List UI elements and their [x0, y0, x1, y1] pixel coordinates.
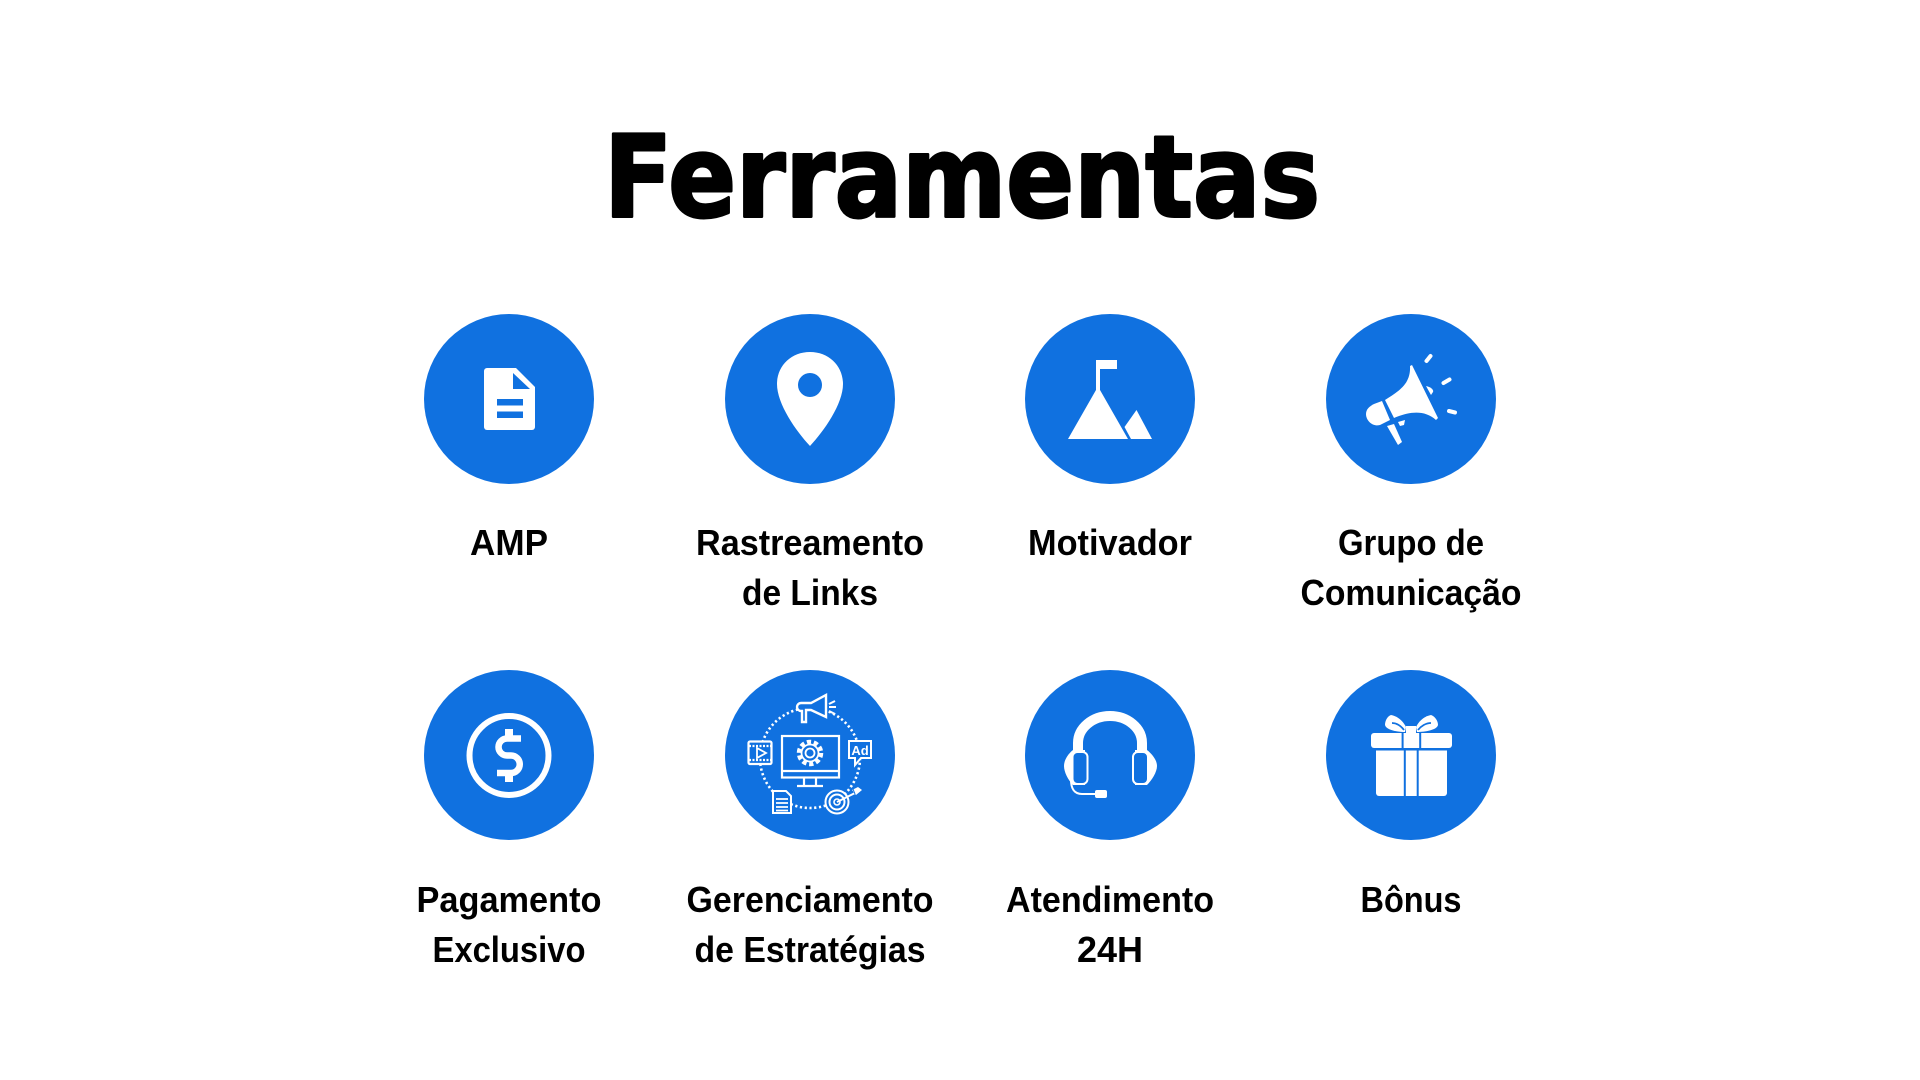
panel: Pagamento Exclusivo	[416, 670, 602, 970]
label: Atendimento 24H	[1006, 879, 1214, 970]
label: Rastreamento de Links: de Links	[742, 572, 878, 613]
label: AMP: AMP	[470, 522, 548, 563]
icon: dollar coin	[424, 670, 594, 840]
label: Rastreamento de Links: Rastreamento	[696, 522, 924, 563]
label: Grupo de Comunicação	[1300, 522, 1522, 613]
label: Gerenciamento de Estratégias: Gerenciamento	[686, 879, 934, 920]
label: Atendimento 24H: 24H	[1077, 929, 1143, 970]
label: Gerenciamento de Estratégias: de Estratégias	[694, 929, 926, 970]
panel: Gerenciamento de Estratégias	[686, 670, 934, 970]
label: Gerenciamento de Estratégias	[686, 879, 934, 970]
panel: Bônus	[1326, 670, 1496, 920]
icon: mountain with flag	[1025, 314, 1195, 484]
icon: headset	[1025, 670, 1195, 840]
panel: Rastreamento de Links	[696, 314, 924, 613]
icon: location pin	[725, 314, 895, 484]
panel: Grupo de Comunicação	[1300, 314, 1522, 613]
panel: Motivador	[1025, 314, 1195, 563]
label: Atendimento 24H: Atendimento	[1006, 879, 1214, 920]
icon: gift	[1326, 670, 1496, 840]
label: Grupo de Comunicação: Grupo de	[1338, 522, 1484, 563]
label: Bônus: Bônus	[1360, 879, 1462, 920]
panel: Atendimento 24H	[1006, 670, 1214, 970]
label: Pagamento Exclusivo: Exclusivo	[432, 929, 586, 970]
title: Ferramentas	[604, 112, 1320, 244]
panel: AMP	[424, 314, 594, 563]
label: Pagamento Exclusivo: Pagamento	[416, 879, 602, 920]
label: Pagamento Exclusivo	[416, 879, 602, 970]
icon: megaphone	[1326, 314, 1496, 484]
icon: document	[424, 314, 594, 484]
icon: strategy cycle: Ad	[851, 743, 869, 758]
label: Motivador: Motivador	[1028, 522, 1192, 563]
label: Rastreamento de Links	[696, 522, 924, 613]
label: Grupo de Comunicação: Comunicação	[1300, 572, 1522, 613]
icon: strategy cycle	[725, 670, 895, 840]
